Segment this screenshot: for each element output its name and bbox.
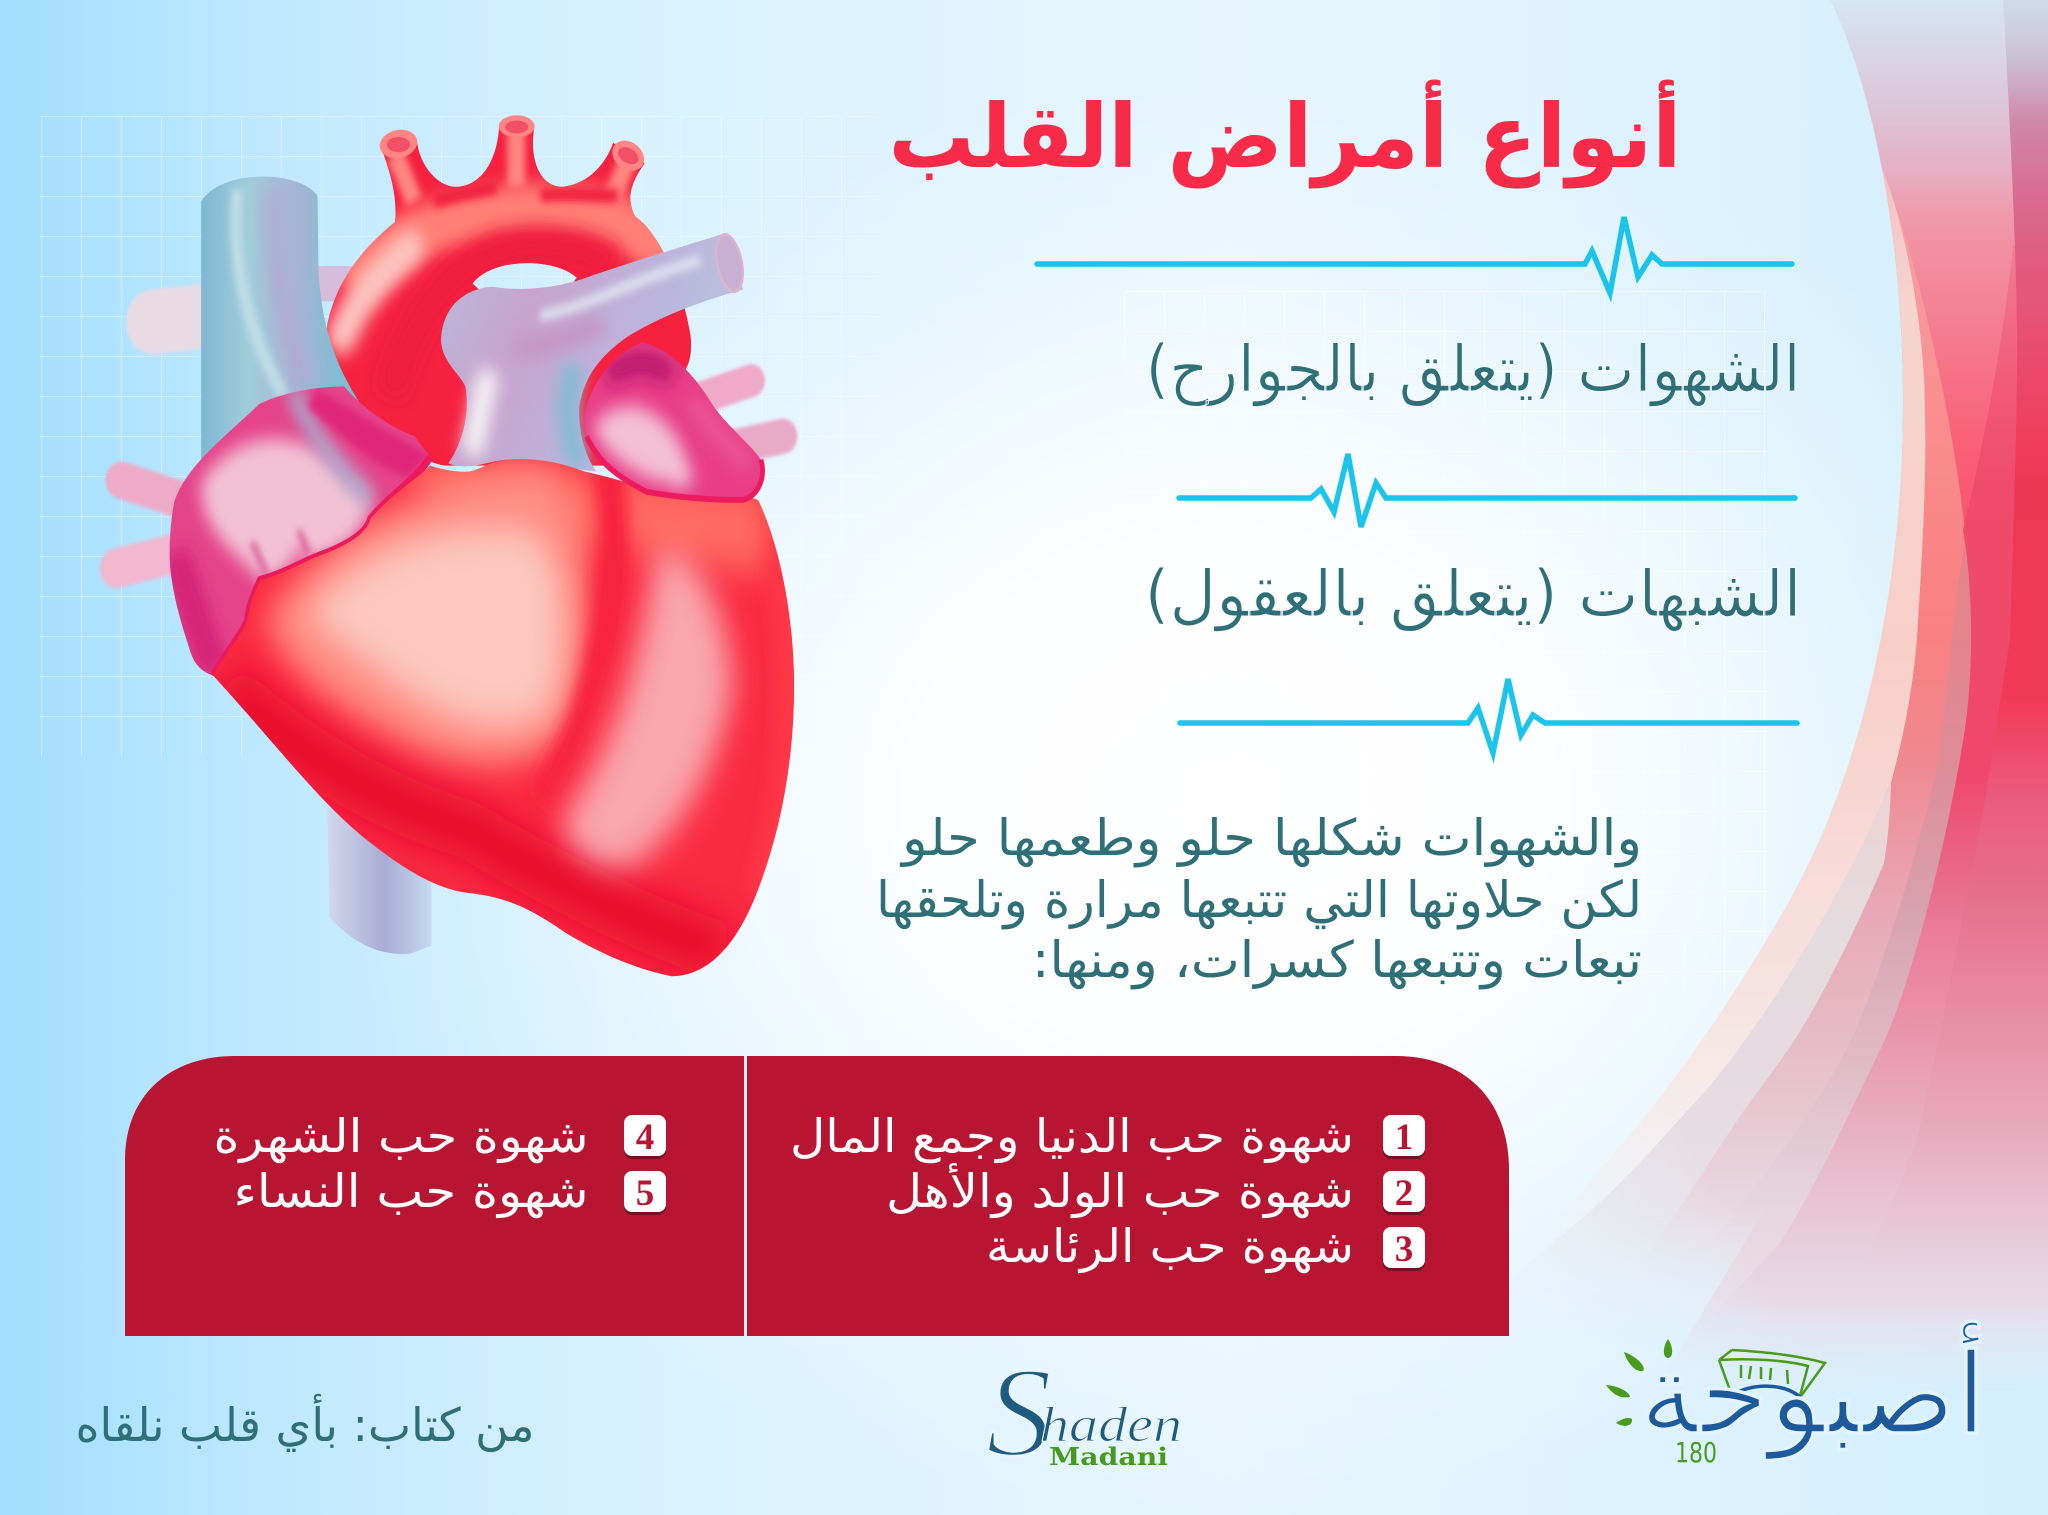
aorta branch openings <box>378 115 648 176</box>
pulmonary trunk <box>441 231 747 471</box>
signature <box>986 1341 1182 1483</box>
logo wordmark: أصبوحة <box>1640 1321 1986 1461</box>
list item 4: شهوة حب الشهرة <box>214 1109 588 1164</box>
title: أنواع أمراض القلب <box>888 79 1682 189</box>
ecg divider 3 <box>1180 679 1797 753</box>
logo <box>1606 1321 1986 1469</box>
icon: sun leaves <box>1606 1339 1672 1426</box>
paragraph: تبعات وتتبعها كسرات، ومنها: <box>1032 931 1642 990</box>
list item 4: 4 <box>636 1117 654 1158</box>
icon: open book <box>1719 1350 1825 1397</box>
wave: main rose <box>1692 0 2048 1350</box>
source credit: من كتاب: بأي قلب نلقاه <box>76 1393 534 1453</box>
paragraph: والشهوات شكلها حلو وطعمها حلو <box>899 809 1642 868</box>
signature: haden <box>1040 1396 1182 1452</box>
wave: inner red band <box>1938 245 2017 863</box>
list item 3: شهوة حب الرئاسة <box>986 1219 1354 1274</box>
panel background <box>125 1056 1509 1336</box>
paragraph <box>876 809 1642 990</box>
list item 2: 2 <box>1395 1173 1413 1214</box>
aorta <box>327 115 691 466</box>
wave: peach band <box>1590 169 1926 1195</box>
wave: salmon band <box>1592 172 1971 1287</box>
wave: grey band <box>1622 784 1891 1210</box>
list item 2: شهوة حب الولد والأهل <box>886 1162 1354 1219</box>
list item 5: شهوة حب النساء <box>234 1164 588 1219</box>
left auricle <box>584 342 762 502</box>
list item 5: 5 <box>636 1173 654 1214</box>
swoosh: red waves <box>1558 0 2048 1350</box>
right atrium <box>170 386 430 676</box>
panel divider <box>744 1056 747 1336</box>
list item 1: شهوة حب الدنيا وجمع المال <box>790 1109 1354 1164</box>
vessel stubs <box>116 284 783 568</box>
wave: crimson column <box>1981 0 2048 826</box>
ecg divider 2 <box>1179 454 1795 527</box>
list item 1: 1 <box>1395 1117 1413 1158</box>
signature: Madani <box>1049 1442 1168 1471</box>
text: doubts: الشبهات (يتعلق بالعقول) <box>1144 558 1802 632</box>
superior vena cava <box>201 177 390 548</box>
heart illustration <box>116 115 794 976</box>
logo number: 180 <box>1675 1436 1717 1469</box>
inferior vessel <box>327 806 431 954</box>
list item 3: 3 <box>1395 1229 1413 1270</box>
ventricles <box>213 454 794 976</box>
paragraph: لكن حلاوتها التي تتبعها مرارة وتلحقها <box>876 871 1642 930</box>
signature: S <box>986 1341 1052 1483</box>
text: desires: الشهوات (يتعلق بالجوارح) <box>1146 333 1800 407</box>
panel: list of desires <box>125 1056 1509 1336</box>
wave: mauve band <box>1854 542 1971 1036</box>
ecg divider 1 <box>1037 217 1792 293</box>
